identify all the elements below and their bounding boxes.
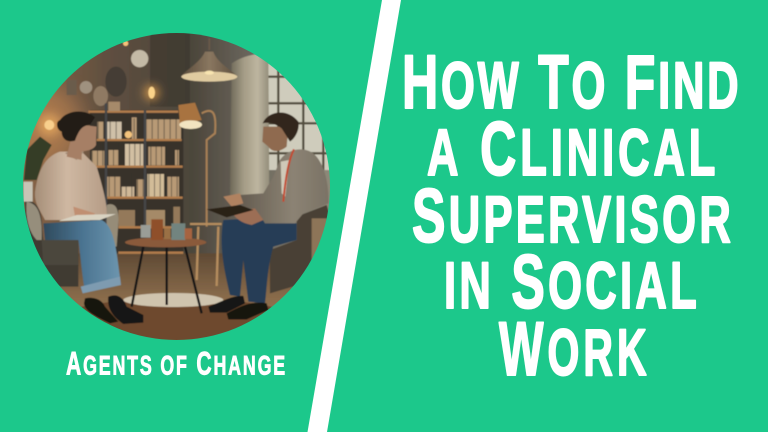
pendant lamp (181, 38, 237, 82)
stool behind (190, 224, 222, 286)
photo circle: counselling session (10, 30, 333, 345)
curtain (230, 53, 269, 197)
plant (24, 137, 52, 180)
bookshelf (88, 102, 183, 253)
brand caption: AGENTS OF CHANGE (66, 345, 285, 382)
title: WORK (499, 308, 647, 392)
title (402, 40, 739, 392)
wall decor (67, 50, 148, 106)
floor lamp (178, 103, 215, 227)
woman in armchair (23, 111, 143, 324)
window (267, 63, 330, 170)
diagonal white stripe (308, 0, 401, 432)
coffee table (125, 219, 206, 313)
rug (82, 292, 272, 340)
room background (23, 33, 330, 308)
title: A CLINICAL (427, 107, 715, 192)
glowing wall lights (38, 41, 159, 136)
title: IN SOCIAL (444, 240, 697, 325)
title: SUPERVISOR (412, 174, 731, 259)
man in armchair (207, 112, 330, 319)
title: HOW TO FIND (402, 40, 739, 125)
